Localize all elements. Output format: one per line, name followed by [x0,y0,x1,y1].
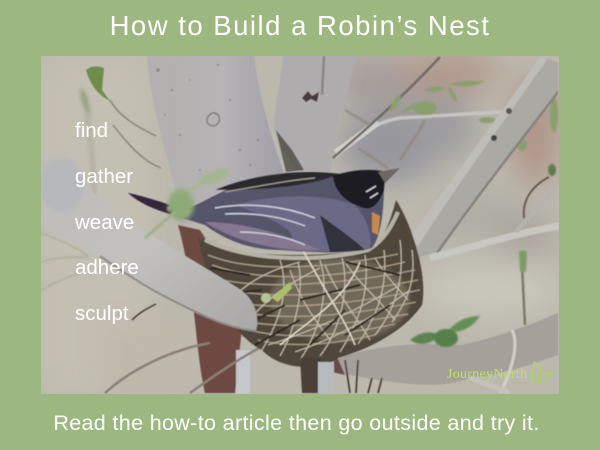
second trunk [273,56,356,172]
logo: Journey North [447,362,552,383]
blurred background [41,52,560,395]
step words list: weave [75,211,134,234]
lower left limb [40,155,257,331]
step words list [75,119,139,325]
bottom right limb [332,250,558,393]
large right branch [408,57,559,258]
step words list: sculpt [75,302,129,325]
lower trunk behind nest [105,225,265,394]
photo: robin on nest in tree [41,56,559,394]
foreground leaves and twigs [86,66,480,347]
tree trunk [147,56,283,240]
footer caption: Read the how-to article then go outside and try it. [53,411,540,435]
step words list: adhere [75,256,139,279]
blurred left twig [80,88,94,200]
robin [128,168,400,252]
icon: butterfly [531,362,552,383]
upper right branches and leaves [333,57,558,176]
step words list: gather [75,165,133,188]
step words list: find [75,119,108,142]
title: How to Build a Robin’s Nest [110,10,490,41]
logo: Journey North: JourneyNorth [447,367,527,382]
nest [198,200,423,393]
